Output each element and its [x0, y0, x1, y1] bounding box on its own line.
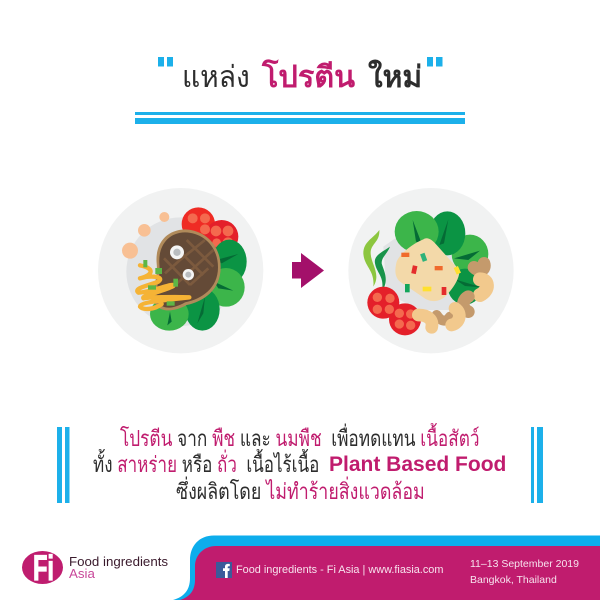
logo text: Food ingredients: [69, 554, 168, 569]
illustration: plant based plate: [348, 188, 514, 353]
footer band: [173, 536, 600, 600]
footer date and place: [470, 558, 579, 586]
description: Plant Based Food: [329, 453, 506, 476]
title: [182, 59, 422, 94]
logo text: [69, 554, 168, 581]
illustration: steak plate: [98, 188, 263, 353]
footer date and place: Bangkok, Thailand: [470, 574, 557, 586]
description: ทั้ง สาหร่าย หรือ ถั่ว เนื้อไร้เนื้อ: [93, 452, 319, 477]
logo: Fi oval: Fi: [33, 549, 54, 588]
description: ซึ่งผลิตโดย ไม่ทำร้ายสิ่งแวดล้อม: [176, 479, 425, 504]
logo text: Asia: [69, 566, 95, 581]
title: แหล่ง: [182, 61, 250, 94]
footer social text: Food ingredients - Fi Asia | www.fiasia.com: [236, 564, 443, 576]
icon: facebook: [216, 562, 232, 578]
title: ใหม่: [368, 61, 422, 94]
arrow: [292, 253, 324, 288]
title: โปรตีน: [262, 61, 355, 94]
title underline: [135, 112, 465, 124]
description: [93, 423, 506, 504]
bars around description: [57, 427, 543, 503]
footer date and place: 11–13 September 2019: [470, 558, 579, 570]
description: โปรตีน จาก พืช และ นมพืช เพื่อทดแทน เนื้อสัตว์: [120, 426, 480, 451]
title quote marks: [158, 57, 442, 66]
